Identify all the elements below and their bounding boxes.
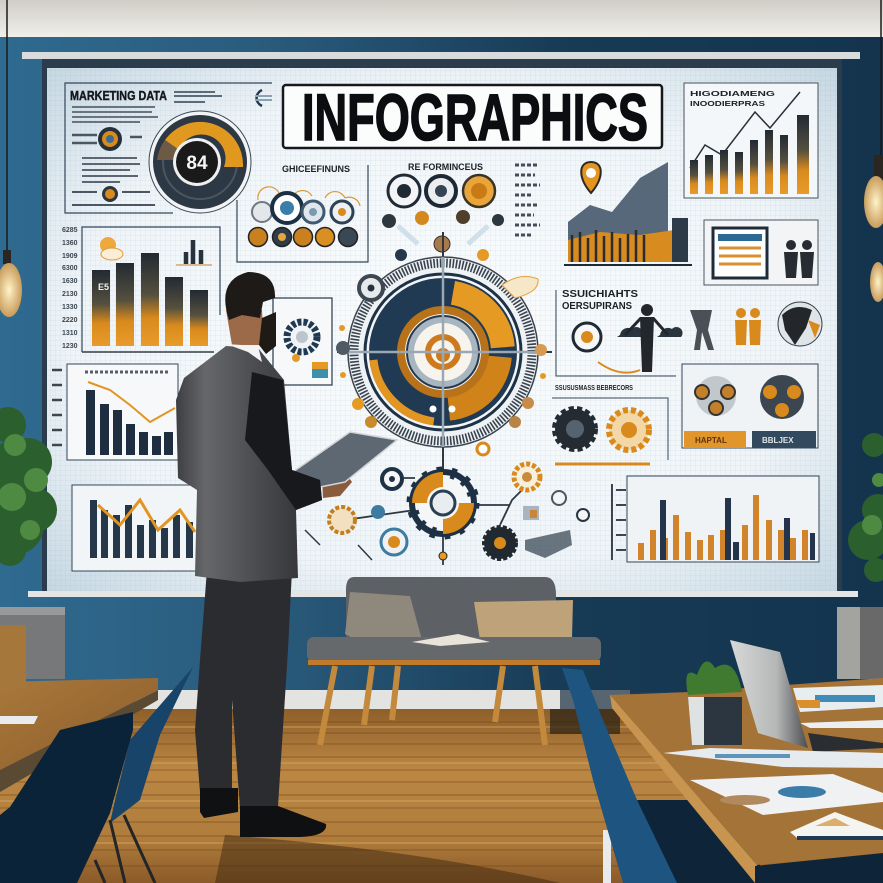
- panel: gears: [552, 383, 668, 464]
- heading: infographics title: INFOGRAPHICS: [302, 80, 648, 154]
- tablet: [290, 432, 397, 490]
- baseboard: [135, 690, 630, 710]
- panel: small gear card: [273, 298, 332, 385]
- panel: top-right bar chart: HIGODIAMENG: [690, 89, 775, 98]
- chart: left gradient bars: 6300: [62, 265, 78, 272]
- sofa bench: [307, 577, 601, 745]
- pendant lights: [0, 0, 883, 317]
- wall: [0, 37, 883, 692]
- panel: performance icons: RE FORMINCEUS: [408, 162, 483, 172]
- left table with chair: [0, 625, 193, 883]
- chart: bottom-right bars: [612, 476, 819, 562]
- wood floor: [0, 709, 883, 883]
- screen bottom bar: [28, 591, 858, 597]
- panel: top-right bar chart: INOODIERPRAS: [690, 99, 765, 108]
- chart: bottom-left bars and line: [72, 485, 222, 571]
- panel: infographic screen: [47, 68, 837, 591]
- chart: left gradient bars: 1310: [62, 330, 78, 337]
- panel: top-right bar chart: [684, 83, 818, 198]
- shoes: [200, 788, 238, 818]
- panel: insights with figure: OERSUPIRANS: [562, 301, 632, 312]
- icons: people and globe: [690, 302, 822, 350]
- chart: area chart: [564, 162, 692, 265]
- panel: cards with gears: HAPTAL: [695, 436, 727, 445]
- right table with laptop, plant and papers: [562, 640, 883, 883]
- side pedestals: [0, 607, 883, 679]
- chart: left gradient bars: E5: [98, 282, 109, 292]
- heading: infographics title: [283, 80, 662, 154]
- chart: left gradient bars: 1630: [62, 278, 78, 285]
- panel: insights with figure: SSUICHIAHTS: [562, 289, 638, 300]
- panel: insights with figure: [556, 289, 683, 376]
- chart: left gradient bars: 2220: [62, 317, 78, 324]
- collar: [226, 344, 262, 362]
- gauge: 84: [149, 111, 251, 213]
- icon: map pin: [581, 162, 601, 193]
- man in suit: [176, 272, 397, 837]
- panel: marketing data: MARKETING DATA: [70, 88, 168, 103]
- jacket: [176, 346, 322, 582]
- dark sleeve: [245, 372, 322, 510]
- chart: left gradient bars: 2130: [62, 291, 78, 298]
- gauge: 84: 84: [186, 153, 208, 174]
- screen roller top: [22, 52, 860, 59]
- panel: cards with gears: [682, 364, 818, 448]
- panel: performance icons: [382, 162, 504, 252]
- chart: left gradient bars: 1330: [62, 304, 78, 311]
- panel: people icons: [704, 220, 818, 285]
- diagram: central radial gauge: [336, 232, 552, 470]
- text block: small data column: [515, 165, 540, 235]
- chart: left gradient bars: 6285: [62, 227, 78, 234]
- chart: left gradient bars: 1360: [62, 240, 78, 247]
- hair: [225, 272, 275, 320]
- chart: left gradient bars: 1909: [62, 253, 78, 260]
- neck and ear: [226, 310, 264, 345]
- trousers: [195, 570, 292, 808]
- ceiling: [0, 0, 883, 38]
- chart: left gradient bars: [62, 227, 220, 352]
- beard: [259, 312, 276, 354]
- panel: marketing data: [65, 83, 272, 213]
- panel: icon cluster left: [237, 164, 368, 262]
- diagram: lower gear cluster: [305, 447, 589, 565]
- panel: icon cluster left: GHICEEFINUNS: [282, 164, 350, 174]
- chart: left lower bars with line: [52, 364, 178, 460]
- hand: [322, 472, 352, 498]
- screen frame: [42, 59, 842, 593]
- panel: cards with gears: BBLJEX: [762, 436, 794, 445]
- chart: left gradient bars: 1230: [62, 343, 78, 350]
- plants: side greenery: [0, 407, 883, 582]
- panel: gears: SSUSUSMASS BEBRECORS: [555, 383, 633, 392]
